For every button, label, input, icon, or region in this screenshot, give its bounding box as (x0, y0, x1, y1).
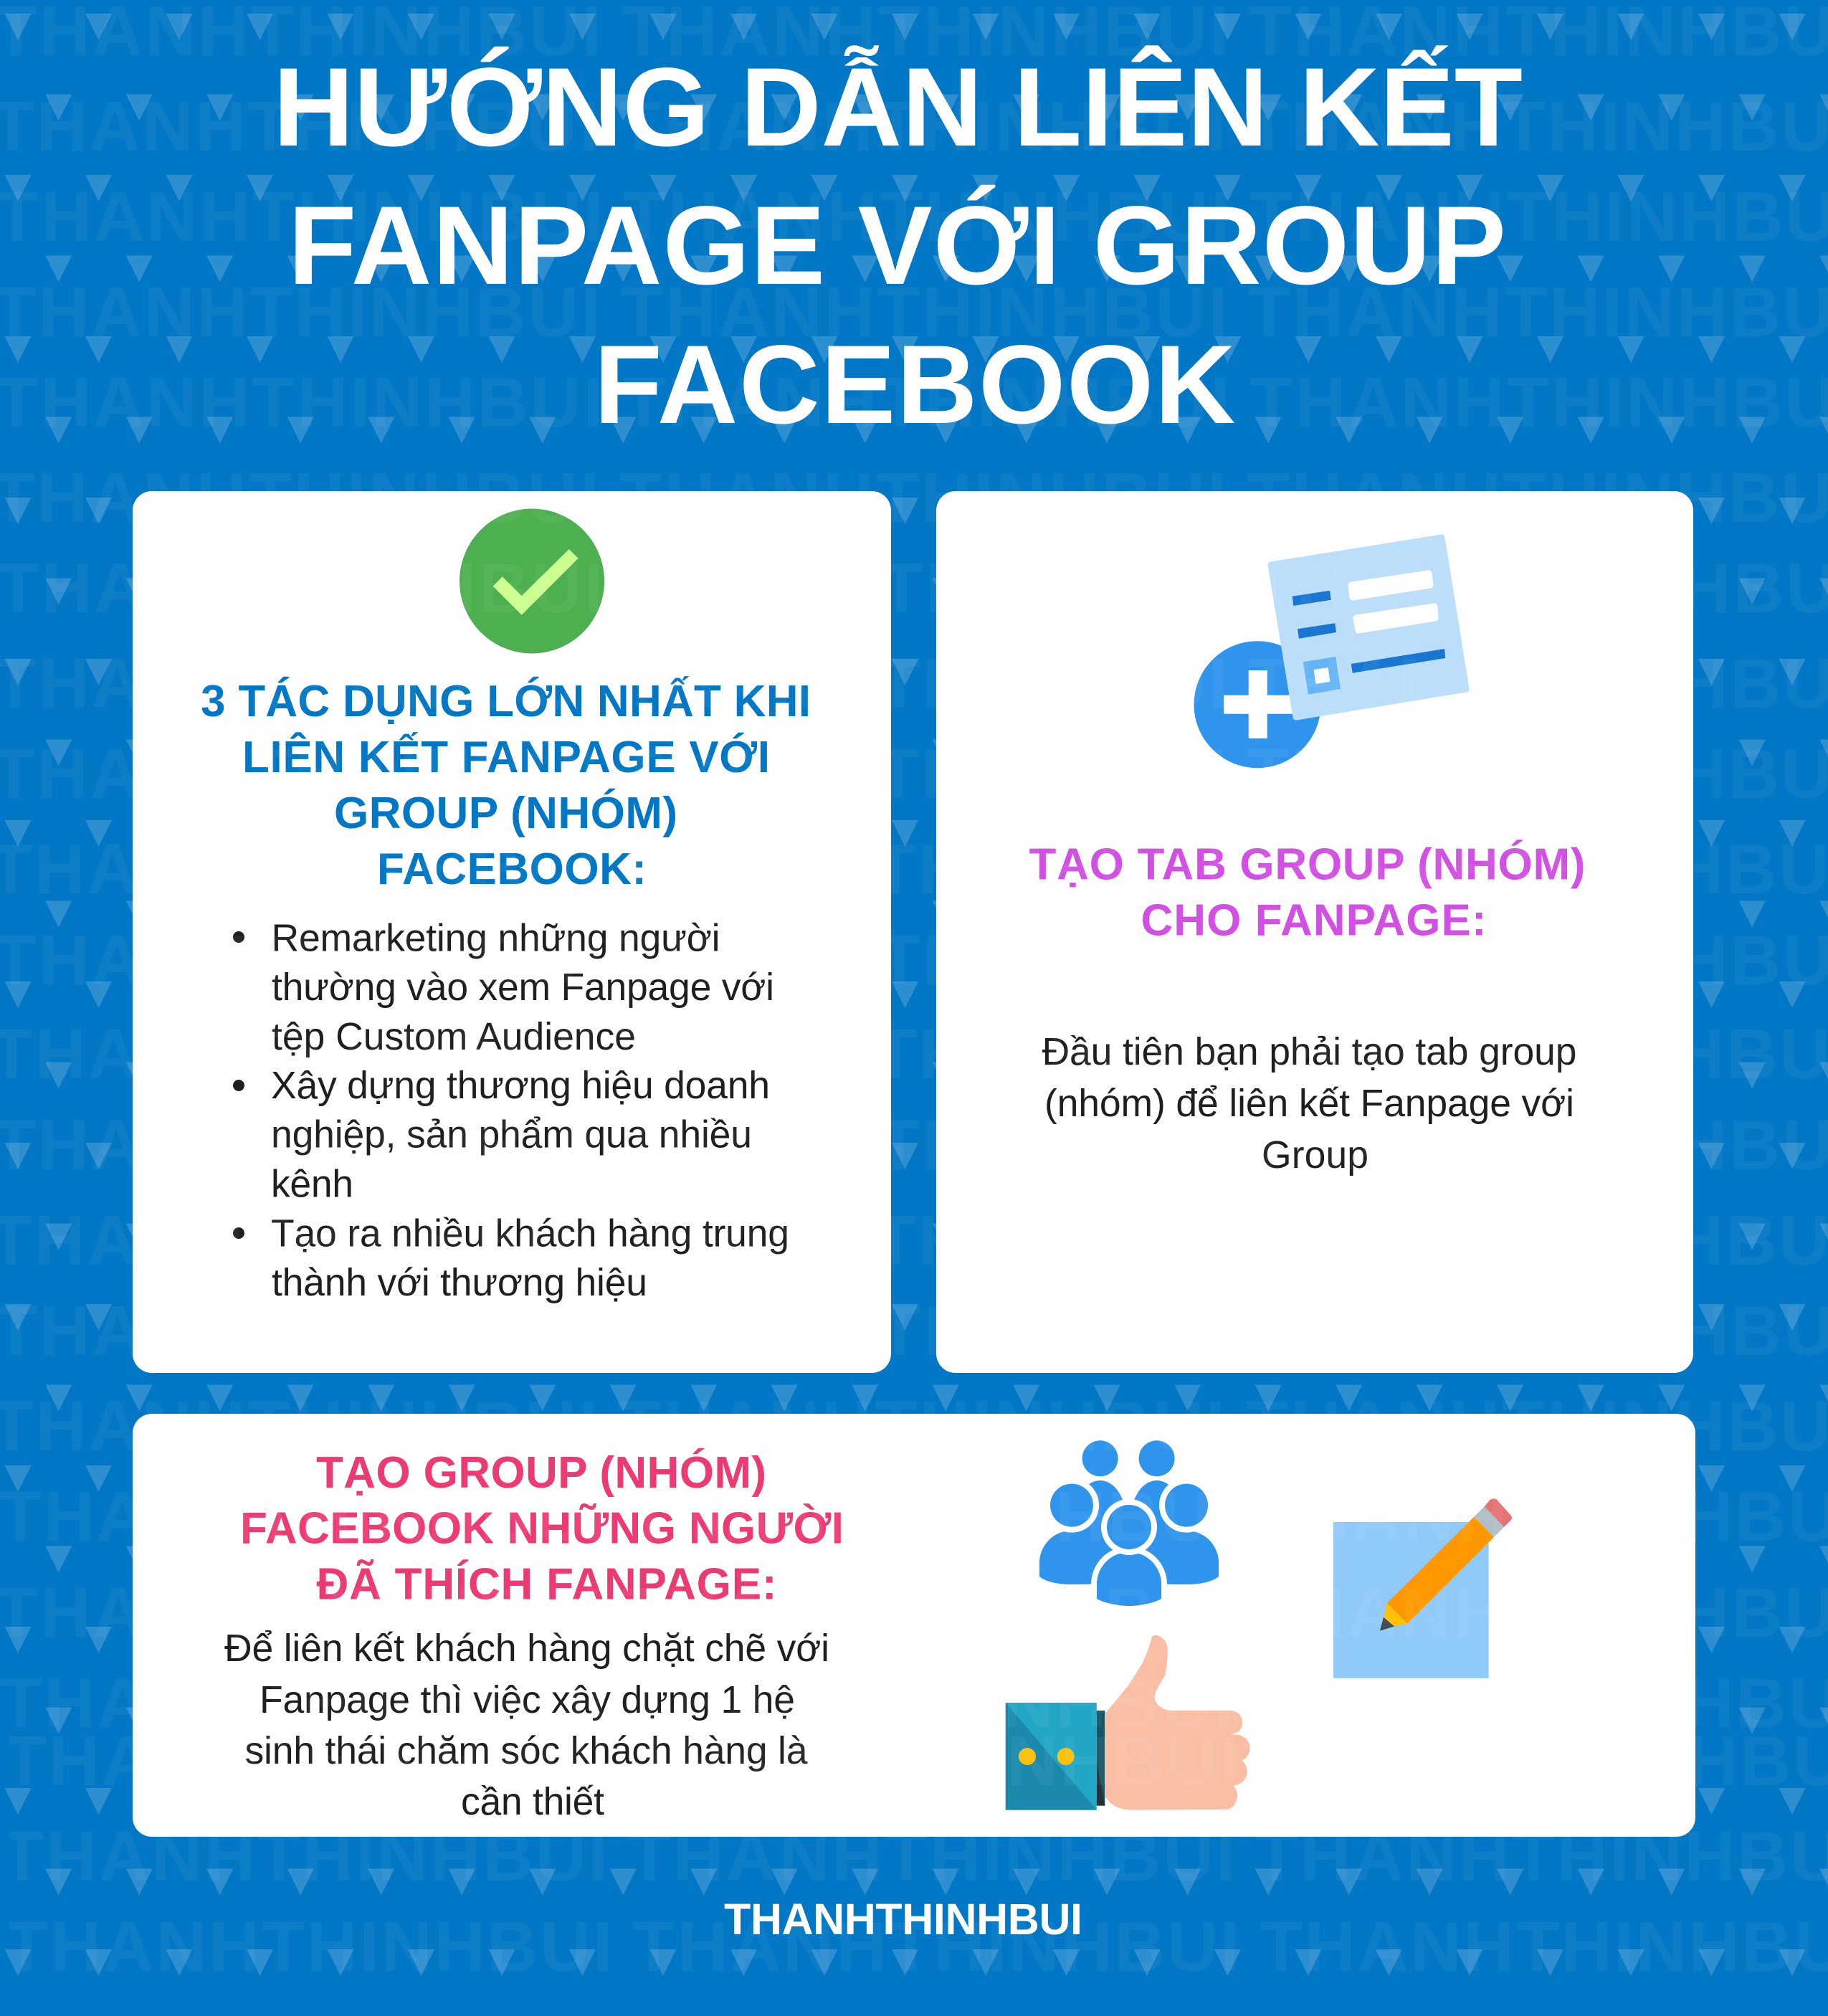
watermark: THANHTHINHBUI (627, 1663, 1236, 1742)
watermark: THANHTHINHBUI (621, 644, 1230, 723)
watermark: THANHTHINHBUI (0, 734, 601, 813)
icon: green check (460, 509, 604, 654)
watermark: THANHTHINHBUI (5, 1907, 614, 1986)
group body text: Fanpage thì việc xây dựng 1 hệ (260, 1679, 795, 1721)
title (273, 45, 1523, 447)
watermark: THANHTHINHBUI (628, 1817, 1237, 1896)
watermark: THANHTHINHBUI (0, 1573, 604, 1652)
benefits heading: 3 TÁC DỤNG LỚN NHẤT KHI (201, 677, 811, 726)
group body text: cần thiết (461, 1781, 604, 1823)
watermark: THANHTHINHBUI (0, 1201, 599, 1280)
watermark: THANHTHINHBUI (622, 1573, 1232, 1652)
watermark: THANHTHINHBUI (619, 458, 1229, 537)
watermark: THANHTHINHBUI (619, 734, 1229, 813)
title: HƯỚNG DẪN LIÊN KẾT (273, 45, 1523, 170)
watermark: THANHTHINHBUI (620, 1106, 1229, 1184)
benefits list: kênh (271, 1163, 353, 1206)
watermark: THANHTHINHBUI (1, 1817, 610, 1896)
watermark: THANHTHINHBUI (0, 1291, 604, 1370)
panel: create group (133, 1414, 1695, 1837)
tab body text: Group (1262, 1134, 1368, 1176)
watermark: THANHTHINHBUI (621, 921, 1230, 999)
benefits list: nghiệp, sản phẩm qua nhiều (271, 1114, 752, 1156)
watermark: THANHTHINHBUI (0, 1014, 599, 1093)
tab body text: Đầu tiên bạn phải tạo tab group (1042, 1031, 1577, 1073)
watermark: THANHTHINHBUI (0, 1477, 608, 1556)
tab heading: TẠO TAB GROUP (NHÓM) (1029, 840, 1586, 889)
benefits heading: LIÊN KẾT FANPAGE VỚI (242, 733, 770, 782)
watermark: THANHTHINHBUI (622, 1291, 1231, 1370)
watermark: THANHTHINHBUI (621, 272, 1230, 351)
icon: people group (1039, 1440, 1219, 1606)
benefits list: Remarketing những người (271, 918, 720, 959)
watermark: THANHTHINHBUI (632, 1907, 1242, 1986)
watermark: THANHTHINHBUI (626, 1477, 1235, 1556)
group heading (240, 1448, 844, 1609)
benefits list: thành với thương hiệu (272, 1262, 647, 1304)
tab heading: CHO FANPAGE: (1141, 896, 1487, 945)
watermark: THANHTHINHBUI (0, 177, 605, 256)
title: FANPAGE VỚI GROUP (288, 184, 1506, 308)
watermark: THANHTHINHBUI (0, 644, 603, 723)
watermark: THANHTHINHBUI (631, 1721, 1240, 1800)
group heading: FACEBOOK NHỮNG NGƯỜI (240, 1504, 844, 1553)
watermark: THANHTHINHBUI (0, 829, 599, 908)
benefits list: Tạo ra nhiều khách hàng trung (271, 1213, 789, 1255)
watermark: THANHTHINHBUI (0, 87, 601, 166)
footer brand: THANHTHINHBUI (724, 1895, 1082, 1944)
watermark: THANHTHINHBUI (618, 1387, 1227, 1465)
title: FACEBOOK (594, 323, 1236, 447)
icon: pencil and note (1333, 1498, 1512, 1678)
watermark: THANHTHINHBUI (4, 1721, 613, 1800)
benefits list: thường vào xem Fanpage với (272, 966, 774, 1009)
watermark: THANHTHINHBUI (624, 548, 1233, 627)
watermark: THANHTHINHBUI (0, 1387, 600, 1465)
watermark: THANHTHINHBUI (0, 921, 603, 999)
group heading: TẠO GROUP (NHÓM) (316, 1448, 766, 1498)
watermark: THANHTHINHBUI (617, 1014, 1227, 1093)
tab heading (1029, 840, 1586, 945)
watermark: THANHTHINHBUI (0, 1106, 602, 1184)
watermark: THANHTHINHBUI (0, 272, 603, 351)
watermark: THANHTHINHBUI (617, 1201, 1226, 1280)
group body text: sinh thái chăm sóc khách hàng là (245, 1730, 808, 1772)
group body text: Để liên kết khách hàng chặt chẽ với (224, 1627, 829, 1670)
group body text (224, 1627, 829, 1823)
watermark: THANHTHINHBUI (623, 177, 1232, 256)
watermark: THANHTHINHBUI (619, 87, 1228, 166)
group heading: ĐÃ THÍCH FANPAGE: (317, 1560, 777, 1609)
benefits list (233, 918, 789, 1304)
watermark: THANHTHINHBUI (617, 829, 1226, 908)
icon: thumbs up (1006, 1635, 1250, 1810)
watermark: THANHTHINHBUI (0, 458, 601, 537)
watermark: THANHTHINHBUI (0, 1663, 609, 1742)
benefits list: Xây dựng thương hiệu doanh (271, 1065, 770, 1107)
panel: benefits (133, 491, 891, 1373)
watermark: THANHTHINHBUI (0, 548, 606, 627)
icon: plus and form (1194, 538, 1466, 768)
benefits heading: GROUP (NHÓM) (334, 789, 677, 838)
watermark: THANHTHINHBUI (0, 363, 605, 442)
panel: create tab (936, 491, 1693, 1373)
watermark: THANHTHINHBUI (622, 363, 1232, 442)
benefits heading (201, 677, 811, 894)
benefits heading: FACEBOOK: (377, 845, 647, 894)
benefits list: tệp Custom Audience (272, 1016, 636, 1058)
tab body text: (nhóm) để liên kết Fanpage với (1044, 1083, 1574, 1125)
tab body text (1042, 1031, 1577, 1176)
